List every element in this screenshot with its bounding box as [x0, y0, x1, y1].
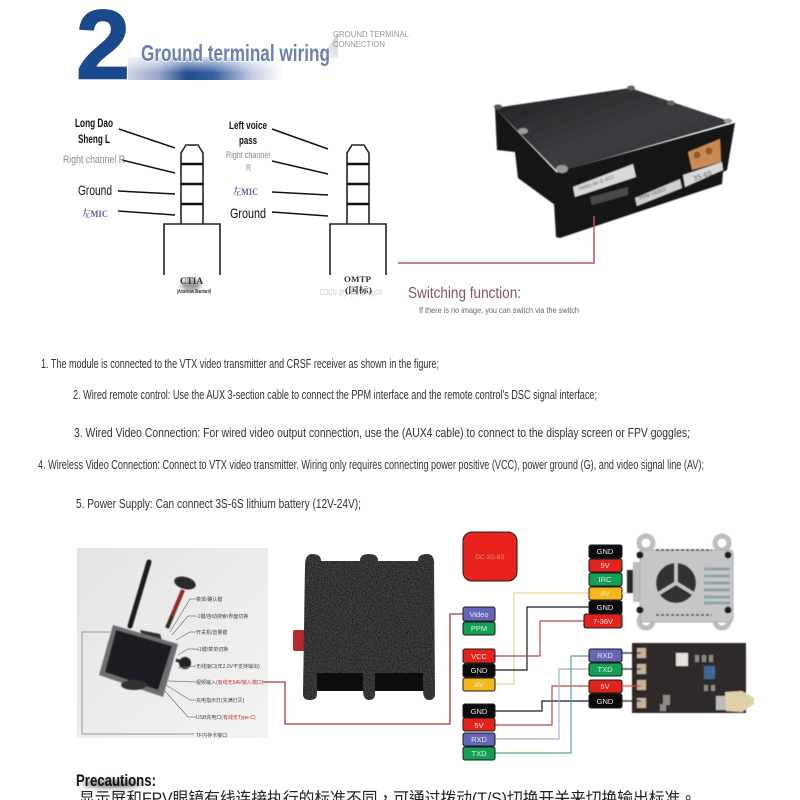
- OMTP caption: OMTP: [344, 274, 371, 284]
- monitor callouts: [196, 596, 264, 739]
- CTIA caption: CTIA: [180, 276, 203, 286]
- pin: PPM: PPM: [471, 624, 487, 633]
- black module photo: [494, 86, 735, 238]
- monitor callouts: -1键/自动搜索/界面切换: [196, 613, 248, 620]
- switch pointer line: [398, 216, 594, 263]
- power badge: DC 3S-6S: [475, 554, 505, 561]
- OMTP jack diagram: [226, 120, 386, 297]
- black GND wire: [495, 607, 589, 670]
- OMTP leader lines: [272, 129, 328, 216]
- port label: TRRD AV G VCC: [578, 174, 616, 193]
- label: ground: Ground: [78, 183, 112, 198]
- switch port: [590, 187, 628, 205]
- module pin labels: [463, 607, 495, 760]
- screws: [494, 86, 732, 173]
- monitor photo panel: [77, 548, 268, 739]
- voltage label: [683, 162, 723, 187]
- pin: 5V: 5V: [600, 561, 610, 570]
- photo background: [77, 548, 268, 738]
- power badge: [463, 532, 517, 581]
- components: [660, 655, 715, 711]
- label: right channel R: [226, 150, 270, 173]
- red receiver 5V wire: [495, 686, 589, 725]
- monitor callouts: 充电指示灯(充满灯灭): [196, 697, 245, 704]
- VTX pin labels: [584, 545, 622, 628]
- OMTP watermark: CSDN @yuyuyuliang00: [320, 288, 382, 297]
- black receiver GND wire: [495, 701, 589, 711]
- pin: TXD: TXD: [598, 665, 613, 674]
- monitor callouts: 菜单/确认键: [196, 596, 222, 603]
- monitor leader lines: [82, 599, 196, 734]
- pin: AV: AV: [600, 589, 610, 598]
- label: left channel: Long Dao: [75, 118, 113, 130]
- module front face: [554, 123, 735, 238]
- instructions list: [38, 357, 704, 511]
- switching function heading: Switching function:: [408, 285, 521, 302]
- OMTP plug outline: [330, 145, 386, 275]
- VTX fan: [656, 562, 696, 603]
- OMTP caption: [344, 274, 372, 295]
- switching function note: If there is no image, you can switch via the switch: [419, 305, 579, 315]
- green wire: [495, 656, 589, 753]
- red power wire: [495, 621, 584, 656]
- monitor callouts: TF内存卡接口: [196, 732, 227, 739]
- blue component: [704, 666, 715, 679]
- pad wires: [622, 653, 641, 701]
- step 5: 5. Power Supply: Can connect 3S-6S lithium battery (12V-24V);: [76, 497, 361, 511]
- CTIA caption: [177, 276, 211, 295]
- port label: [573, 164, 636, 197]
- PPM label: PPM VIDEO: [639, 187, 667, 202]
- module body: [303, 554, 435, 700]
- VTX corner holes: [636, 552, 732, 614]
- label: left channel: Sheng L: [78, 134, 110, 146]
- VTX body: [640, 550, 733, 622]
- step 1: 1. The module is connected to the VTX video transmitter and CRSF receiver as shown in the figure;: [41, 357, 439, 371]
- pin: AV: [463, 678, 495, 691]
- pin: GND: GND: [597, 697, 614, 706]
- label: left voice pass: [229, 120, 267, 147]
- solder pads: [637, 648, 646, 708]
- monitor illustration: [99, 562, 197, 697]
- chip: [676, 653, 688, 666]
- pin: GND lower: [463, 704, 495, 718]
- pin: GND: GND: [471, 666, 488, 675]
- label: left voice pass: Left voice: [229, 120, 267, 132]
- step 2: 2. Wired remote control: Use the AUX 3-section cable to connect the PPM interface and the remote control's DSC signal interface;: [73, 388, 597, 402]
- module recesses: [317, 673, 423, 691]
- monitor callouts: USB充电口(有线无Type-C): [196, 714, 256, 721]
- pin: Video: [463, 607, 495, 621]
- step 3: 3. Wired Video Connection: For wired video output connection, use the (AUX4 cable) to connect to the display screen or FPV goggles;: [74, 426, 690, 440]
- english subtitle: CONNECTION: [333, 40, 385, 49]
- label: right channel R: Right channel: [226, 150, 270, 160]
- pin: TXD: [463, 747, 495, 760]
- header gradient band: [128, 57, 283, 80]
- label: ground: Ground: [230, 205, 266, 221]
- pin: 5V: [463, 718, 495, 731]
- pin: GND: [463, 664, 495, 677]
- header grey wedge: [320, 33, 338, 58]
- wiring lines: [495, 593, 589, 753]
- precautions heading: Precautions:: [76, 772, 156, 790]
- VTX heatsink: [704, 569, 730, 603]
- VTX vents: [656, 550, 712, 615]
- monitor callouts: 视频输入(有线无5AV输入端口): [196, 679, 264, 686]
- label: right channel R: R: [246, 163, 251, 173]
- CTIA plug outline: [164, 145, 220, 275]
- pin: VCC: [463, 649, 495, 663]
- pin: 5V: 5V: [600, 682, 610, 691]
- label: left voice pass: pass: [239, 135, 257, 147]
- module left side: [495, 108, 557, 205]
- label: left channel: [75, 118, 113, 146]
- blue wire: [495, 669, 589, 739]
- CTIA smudge: [181, 279, 201, 291]
- pin: RXD: RXD: [471, 735, 487, 744]
- label: mic: 左MIC: [82, 208, 108, 220]
- label: mic: 左MIC: [233, 186, 258, 198]
- pin: TXD: TXD: [472, 749, 487, 758]
- pin: GND: GND: [597, 547, 614, 556]
- receiver pin labels: [589, 649, 622, 708]
- pin: VCC: VCC: [471, 652, 487, 661]
- title: Ground terminal wiring: [141, 40, 330, 66]
- CRSF receiver board: [622, 643, 754, 713]
- pin: 5V: 5V: [474, 721, 484, 730]
- monitor callouts: 开关机/音量键: [196, 629, 227, 636]
- header: [76, 0, 410, 100]
- english subtitle: GROUND TERMINAL: [333, 30, 410, 39]
- label: right channel: Right channel R: [63, 154, 125, 166]
- XT connector: [688, 139, 721, 170]
- pin: RXD: RXD: [597, 651, 613, 660]
- CTIA caption: (American Standard): [177, 289, 211, 295]
- CTIA leader lines: [118, 129, 175, 215]
- VTX connector: [627, 562, 646, 602]
- pin: PPM: [463, 622, 495, 635]
- yellow AV wire: [495, 593, 589, 684]
- antenna connector: [716, 691, 754, 712]
- OMTP caption: (国标): [345, 285, 372, 295]
- pin: Video: Video: [469, 610, 489, 619]
- mounting ears: [639, 536, 729, 628]
- precautions smudge: [82, 780, 142, 788]
- board: [632, 643, 746, 713]
- pin: 7-36V: 7-36V: [593, 617, 613, 626]
- CTIA jack diagram: [63, 118, 220, 295]
- short VTX link: [622, 592, 627, 594]
- pin: GND: GND: [597, 603, 614, 612]
- pin: IRC: IRC: [599, 575, 612, 584]
- monitor callouts: 无线接口(年2.0V不支持输出): [196, 663, 260, 670]
- video wire from monitor to module: [263, 614, 463, 724]
- PPM label: [635, 179, 682, 206]
- monitor callouts: +1键/菜单切换: [196, 646, 228, 653]
- module top face: [495, 88, 732, 172]
- red antenna port: [293, 630, 305, 651]
- voltage label: 3S-6S: [692, 170, 713, 183]
- pin: AV: AV: [474, 680, 484, 689]
- pin: RXD: [463, 733, 495, 746]
- english subtitle: [333, 30, 410, 49]
- pin: GND lower: GND: [471, 707, 488, 716]
- VTX video transmitter: [627, 536, 733, 628]
- black module top view: [293, 554, 435, 700]
